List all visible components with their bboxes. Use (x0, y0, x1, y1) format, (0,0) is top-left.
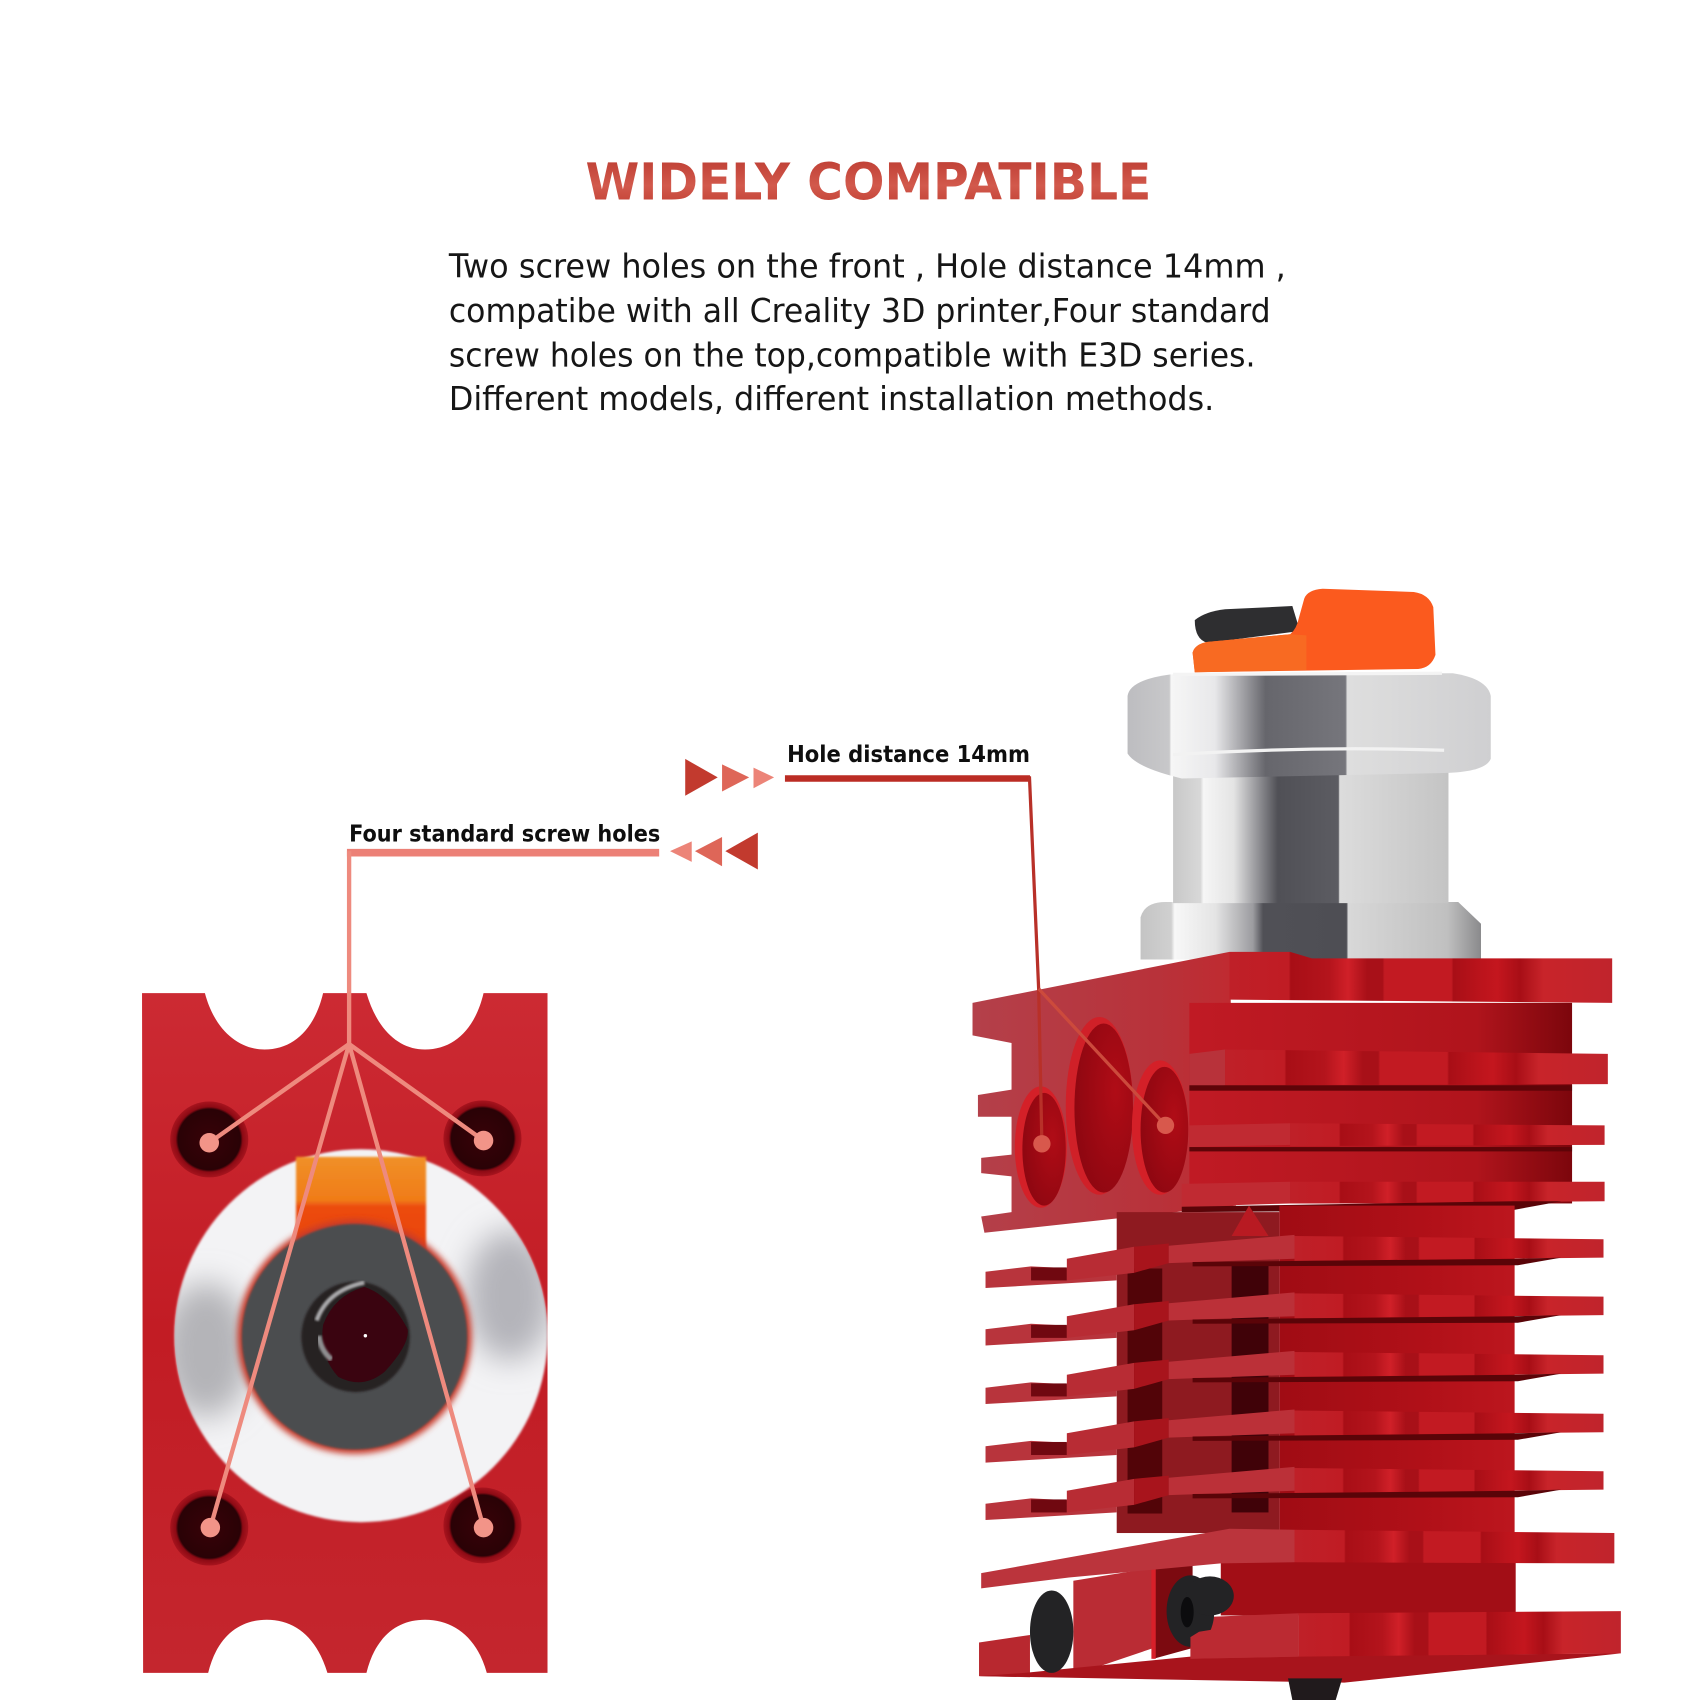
orange clip (1193, 589, 1435, 672)
base fin (981, 1529, 1614, 1588)
dark ptfe washer (237, 1220, 472, 1454)
description text block: Two screw holes on the front , Hole distance 14mm , (448, 248, 1286, 286)
lower left column (1117, 1206, 1279, 1533)
description text block (448, 248, 1286, 418)
infographic canvas (142, 162, 1621, 1700)
silver lower flange (1141, 902, 1481, 960)
bottom block (979, 1561, 1621, 1683)
callout: hole distance label: Hole distance 14mm (787, 742, 1030, 768)
heat sink upper face (973, 952, 1236, 1233)
set screw: left (1030, 1590, 1073, 1673)
silver top flange (1128, 673, 1491, 778)
description text block: compatibe with all Creality 3D printer,Four standard (449, 292, 1271, 330)
center bore (301, 1282, 410, 1392)
heat sink mounting holes (1015, 1017, 1188, 1208)
black ptfe ring (1195, 606, 1300, 643)
panel: side view of hotend (973, 589, 1621, 1700)
silver neck (1173, 760, 1448, 903)
silver disc (160, 1149, 553, 1522)
title: WIDELY COMPATIBLE (585, 153, 1151, 212)
lower core (1279, 1206, 1515, 1569)
nozzle (1288, 1678, 1342, 1700)
four screw holes (170, 1100, 521, 1566)
orange tab (296, 1157, 426, 1265)
arrows: pointing left (670, 833, 758, 870)
arrows: pointing right (685, 759, 774, 796)
panel: top view of heat block (142, 993, 553, 1673)
description text block: Different models, different installation methods. (449, 380, 1214, 418)
top fin (1229, 952, 1612, 1003)
set screw: right (1167, 1575, 1299, 1659)
description text block: screw holes on the top,compatible with E3D series. (449, 336, 1255, 374)
lower fin rows (986, 1235, 1604, 1520)
callout: hole distance leader lines (785, 776, 1174, 1152)
upper fins (1182, 1049, 1608, 1212)
callout: four holes leader lines (199, 851, 659, 1537)
upper core (1189, 1003, 1572, 1203)
callout: four holes label: Four standard screw holes (349, 821, 660, 847)
red block with notches (142, 993, 548, 1673)
